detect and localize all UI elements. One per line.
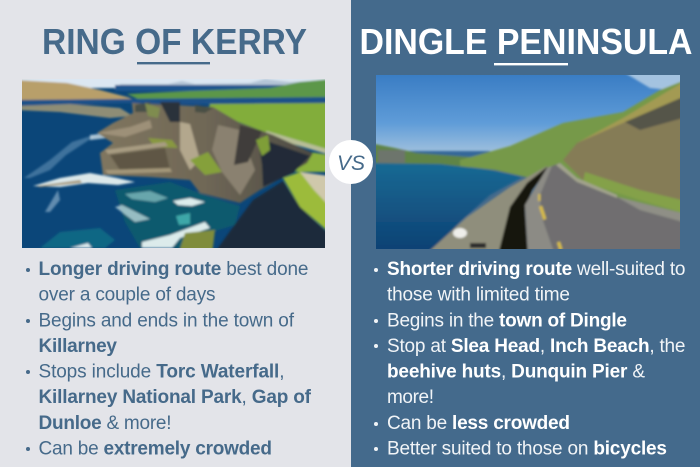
far sea strip xyxy=(409,150,490,158)
bullet list: dingle peninsula: Begins in the town of Dingle xyxy=(387,310,627,331)
bullet list: ring of kerry: Can be extremely crowded xyxy=(38,439,272,460)
panel: ring of kerry xyxy=(22,28,325,458)
vs badge xyxy=(329,140,373,184)
bullet list: dingle peninsula: Stop at Slea Head, Inch Beach, the xyxy=(387,336,686,357)
bullet list: dingle peninsula: beehive huts, Dunquin Pier & xyxy=(387,362,645,382)
bird xyxy=(453,228,467,238)
bullet list: ring of kerry: Stops include Torc Waterfall, xyxy=(38,362,284,382)
bullet list: dingle peninsula: Shorter driving route well-suited to xyxy=(387,259,686,280)
bullet list: dingle peninsula: Can be less crowded xyxy=(387,413,570,434)
teal shallows xyxy=(115,182,240,248)
bullet list: dingle peninsula: those with limited time xyxy=(387,285,570,306)
rock face xyxy=(563,118,680,200)
bullet list: ring of kerry: Killarney National Park, Gap of xyxy=(38,387,312,408)
green fields xyxy=(207,103,330,152)
sea streaks xyxy=(24,133,100,178)
bullet list: ring of kerry: over a couple of days xyxy=(38,285,216,306)
bullet list: ring of kerry xyxy=(26,259,312,460)
dark cliff front xyxy=(217,180,325,248)
bullet list: ring of kerry: Begins and ends in the town of xyxy=(38,310,295,331)
panel: dingle peninsula xyxy=(351,0,700,467)
heading underline: dingle peninsula xyxy=(494,63,568,65)
cliffs xyxy=(97,103,313,203)
bullet list: dingle peninsula xyxy=(374,259,686,460)
photo: dingle coastal road xyxy=(376,75,680,249)
bullet list: dingle peninsula: more! xyxy=(387,387,434,408)
road xyxy=(522,164,680,249)
heading: ring of kerry: RING OF KERRY xyxy=(42,21,307,62)
bullet list: ring of kerry: Longer driving route best done xyxy=(38,259,308,280)
foam band xyxy=(33,173,135,187)
bullet list: dingle peninsula: Better suited to those on bicycles xyxy=(387,439,667,460)
bullet list: ring of kerry: Dunloe & more! xyxy=(38,413,172,434)
stone wall xyxy=(425,166,548,255)
photo: kerry cliffs xyxy=(22,79,325,248)
heading underline: ring of kerry xyxy=(137,62,210,64)
green hillside xyxy=(460,78,690,215)
vs badge: VS xyxy=(337,152,365,175)
sky and far hills xyxy=(22,79,325,90)
left headland xyxy=(370,143,470,168)
sea xyxy=(370,163,522,255)
bullet list: ring of kerry: Killarney xyxy=(38,336,117,357)
